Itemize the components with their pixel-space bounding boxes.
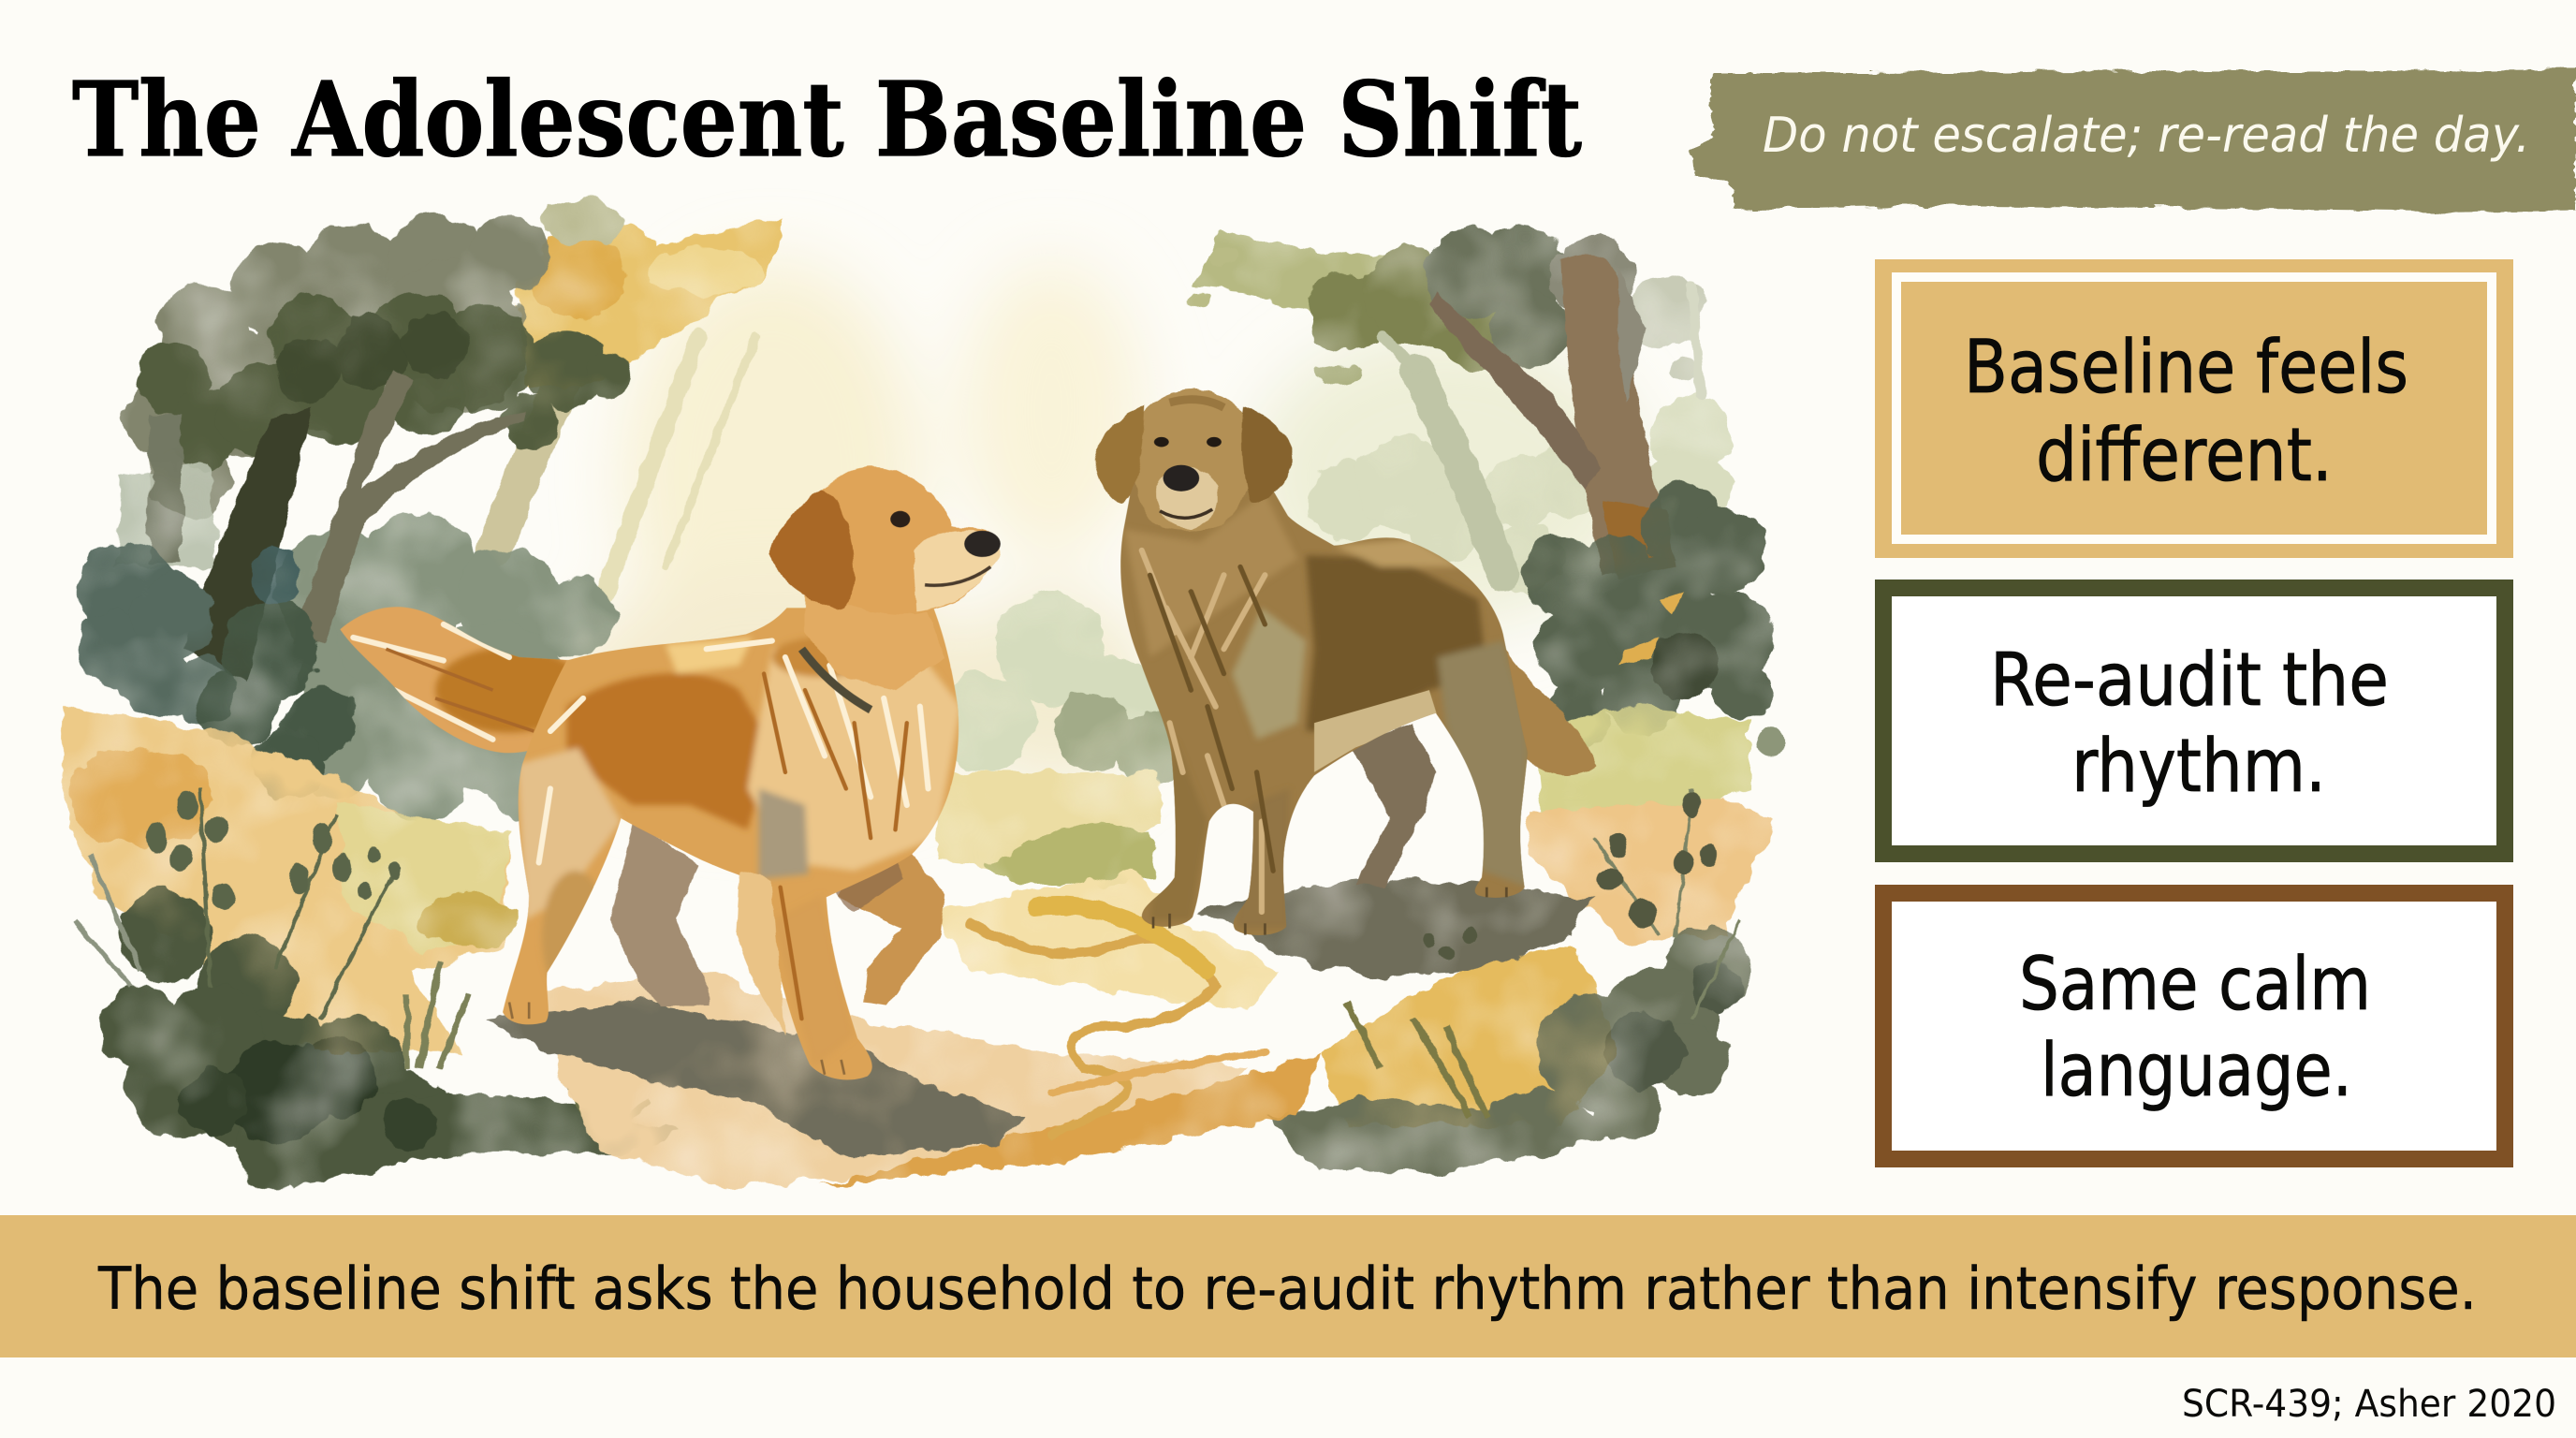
bottom left dark bushes (98, 890, 681, 1186)
card: re-audit the rhythm: rhythm. (2071, 725, 2326, 809)
bottom left yellow foliage (59, 707, 518, 1051)
distant pale trunks (492, 337, 755, 594)
left trees foliage (124, 213, 549, 518)
ears (1094, 405, 1145, 503)
card: re-audit the rhythm (1883, 588, 2505, 854)
head (792, 466, 1000, 614)
far hind leg (1351, 723, 1436, 888)
bottom summary banner (0, 1215, 2576, 1357)
collar (801, 649, 871, 710)
path and ground (542, 871, 1323, 1186)
left background bushes (274, 513, 614, 822)
bottom left leaf sprigs (74, 788, 649, 1137)
neck ruff (805, 575, 944, 690)
right trees foliage (1186, 225, 1704, 385)
head markings (1170, 400, 1223, 407)
card: re-audit the rhythm: Re-audit the (1990, 638, 2389, 723)
right flowers (1618, 592, 1684, 666)
card: same calm language: language. (2041, 1029, 2352, 1113)
left blue-grey bushes (76, 542, 238, 723)
chest feather fur (736, 871, 785, 1035)
mid background bushes (936, 594, 1186, 888)
eyes and nose (1154, 437, 1169, 447)
left tree trunks (184, 370, 526, 682)
muzzle (1156, 466, 1218, 529)
dog: left golden retriever (329, 466, 1001, 1101)
tagline: torn brush banner (1690, 69, 2576, 212)
title: The Adolescent Baseline Shift (72, 59, 1582, 180)
muzzle (914, 530, 1000, 611)
tail (340, 607, 569, 753)
ground shadows (485, 879, 1593, 1158)
card: same calm language: Same calm (2019, 943, 2371, 1027)
main body (1120, 481, 1528, 935)
dog: right darker retriever (1094, 389, 1597, 953)
card: baseline feels different (1875, 259, 2513, 558)
illustration: two golden retrievers on a forest path (59, 198, 1786, 1186)
tagline: torn brush banner: Do not escalate; re-read the day. (1763, 108, 2530, 164)
right pale trees (1308, 396, 1732, 594)
body and legs (503, 608, 959, 1080)
ear (768, 490, 854, 611)
card: baseline feels different: Baseline feels (1964, 326, 2408, 410)
card: baseline feels different: different. (2036, 414, 2333, 498)
tail (1486, 647, 1597, 775)
right plant sprigs (1347, 788, 1741, 1117)
nose and eye (964, 531, 1001, 557)
right yellow foliage (1323, 707, 1774, 1125)
far legs (611, 822, 944, 1005)
paws (1153, 888, 1506, 935)
paws (509, 1003, 844, 1075)
bottom right dark plants (1265, 927, 1751, 1173)
pale background wash (559, 263, 1643, 805)
left trees yellow canopy (518, 198, 785, 386)
right tree trunk (1429, 254, 1676, 579)
source citation: SCR-439; Asher 2020 (2182, 1383, 2556, 1426)
card: same calm language (1883, 893, 2505, 1159)
head (1133, 389, 1257, 531)
right dark bush (1521, 483, 1774, 748)
